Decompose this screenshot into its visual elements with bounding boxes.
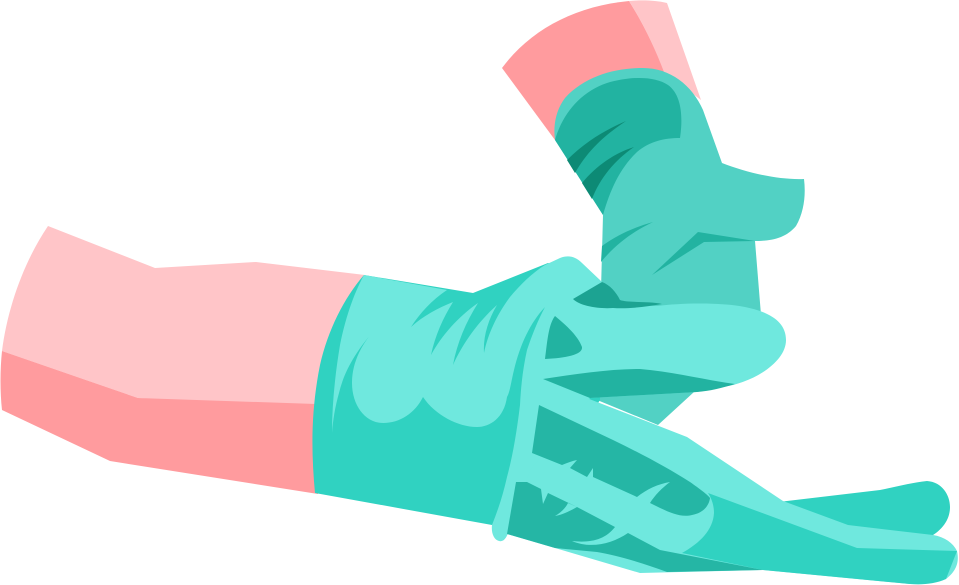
glove shadow: knuckle: [573, 282, 662, 308]
upper arm: forearm skin: [502, 0, 701, 140]
glove shadow: lower pane: [507, 482, 763, 572]
upper hand: glove: [554, 68, 805, 425]
glove shadow: upper pane: [532, 405, 710, 516]
lower arm: forearm skin: [0, 226, 365, 494]
glove shadow: upper cuff: [555, 78, 681, 215]
glove shadow: under finger: [543, 369, 735, 398]
glove creases: wrist streaks: [601, 222, 755, 275]
glove shadow: palm triangle: [545, 316, 582, 359]
back finger: [770, 481, 950, 537]
upper hand fold and thumb: light glove: [332, 256, 786, 541]
lower hand: light glove: [507, 376, 958, 584]
lower hand: teal finger: [682, 493, 957, 584]
glove creases: dark streaks: [567, 121, 634, 199]
lower hand: cuff base: [312, 263, 600, 525]
